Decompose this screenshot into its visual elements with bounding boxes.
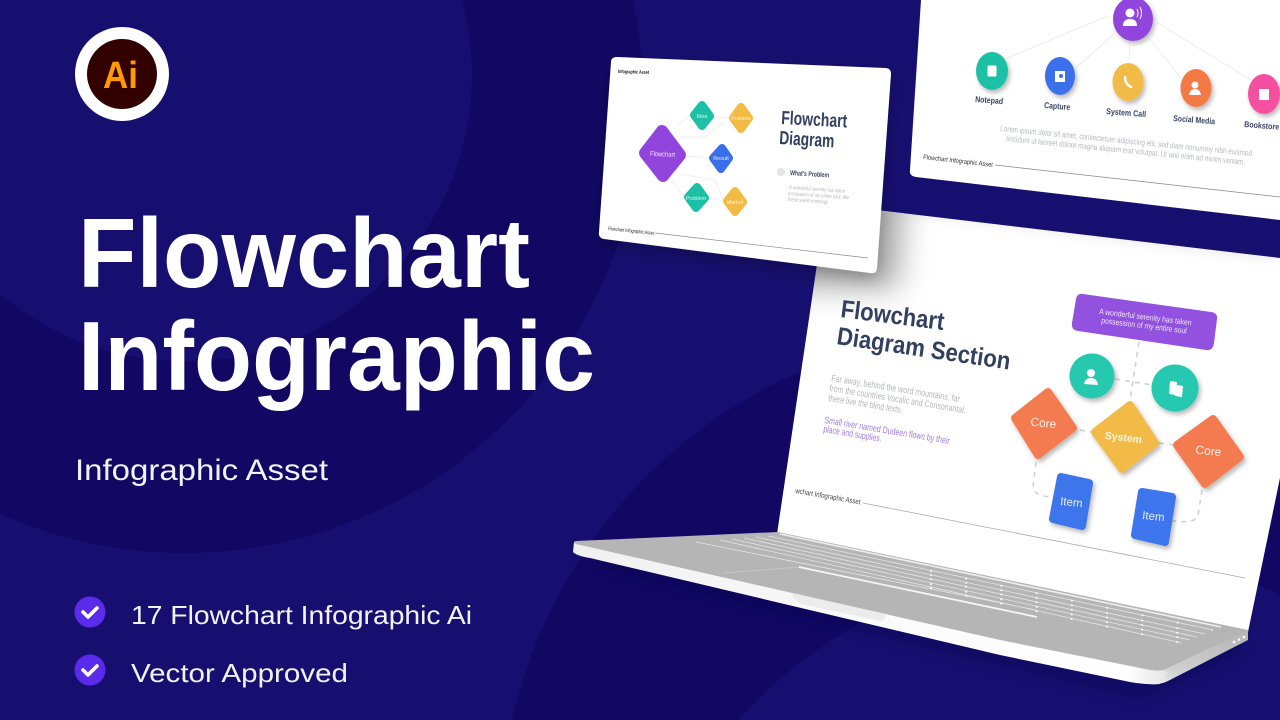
diamond: idea: Idea xyxy=(697,114,708,120)
title: Infographic xyxy=(78,301,595,411)
purple callout: possession of my entire soul xyxy=(1101,316,1187,335)
screen purple note xyxy=(823,415,951,447)
screen purple note: Small river named Dudeen flows by their xyxy=(824,415,951,447)
card: item right xyxy=(1135,492,1172,542)
diamond: result: Result xyxy=(713,156,729,162)
laptop screen xyxy=(777,210,1280,632)
teal circle: pages xyxy=(1152,364,1198,412)
screen title: Diagram Section xyxy=(835,322,1012,376)
diamond: system: System xyxy=(1104,430,1143,446)
laptop shadow xyxy=(600,562,1240,692)
node: capture: Capture xyxy=(1044,100,1071,112)
diamond: market xyxy=(727,191,744,212)
dashed connectors xyxy=(1033,342,1202,522)
laptop front lip xyxy=(573,542,1168,684)
footer: Flowchart Infographic Asset xyxy=(923,154,993,169)
node: hub xyxy=(1113,0,1153,41)
slide paragraph xyxy=(788,185,849,206)
diamond: core left xyxy=(1015,392,1073,455)
screen footer xyxy=(794,486,1245,578)
screen paragraph: there live the blind texts. xyxy=(828,393,903,416)
logo: Adobe Illustrator xyxy=(75,27,169,121)
title: Flowchart xyxy=(78,198,530,308)
laptop side xyxy=(1150,630,1248,684)
title xyxy=(78,198,595,411)
footer xyxy=(923,154,1280,197)
node: notepad: Notepad xyxy=(975,94,1004,106)
diamond: problem: Problem xyxy=(686,196,707,202)
diamond: flowchart: Flowchart xyxy=(650,151,675,159)
what's problem xyxy=(777,168,829,179)
laptop deck xyxy=(574,532,1248,671)
teal circle: people xyxy=(1070,354,1114,398)
diamond: core right: Core xyxy=(1195,443,1222,459)
slide paragraph: these sweet mornings xyxy=(788,197,828,206)
diamond: result xyxy=(713,148,729,169)
diamond: process xyxy=(731,107,751,129)
node: capture xyxy=(1044,57,1075,112)
laptop xyxy=(573,210,1280,684)
diamond: problem xyxy=(686,187,707,208)
screen purple note: place and supplies. xyxy=(823,424,883,445)
what's problem: What's Problem xyxy=(790,170,829,179)
diamond: core right xyxy=(1177,419,1240,484)
node: notepad xyxy=(975,52,1008,106)
logo: Adobe Illustrator: Ai xyxy=(103,55,138,97)
slide footer xyxy=(608,226,868,258)
slide footer: Flowchart Infographic Asset xyxy=(608,226,655,237)
panel: top right slide xyxy=(910,0,1280,220)
diamond: idea xyxy=(694,105,710,126)
keyboard xyxy=(696,534,1221,643)
diamond: market: Market xyxy=(727,200,744,206)
screen footer: wchart Infographic Asset xyxy=(794,486,862,507)
trackpad notch xyxy=(792,593,886,621)
slide paragraph: possession of my entire soul, like xyxy=(788,191,849,201)
node: system call xyxy=(1106,63,1147,119)
feature: 17 flowchart infographic: 17 Flowchart Infographic Ai xyxy=(131,600,472,630)
screen paragraph: Far away, behind the word mountains, far xyxy=(831,373,961,405)
card: item right: Item xyxy=(1142,510,1165,524)
purple callout xyxy=(1072,294,1217,350)
slide header: Infographic Asset xyxy=(618,69,649,76)
screen title: Flowchart xyxy=(839,295,947,336)
card: item left xyxy=(1053,477,1089,526)
subtitle: Infographic Asset xyxy=(75,454,329,487)
diamond: flowchart xyxy=(645,131,680,176)
diamond: process: Process xyxy=(731,116,751,122)
node: bookstore xyxy=(1244,74,1280,132)
connector lines xyxy=(1007,16,1251,80)
connector lines xyxy=(672,115,729,201)
feature: vector approved: Vector Approved xyxy=(131,658,348,688)
purple callout: A wonderful serenity has taken xyxy=(1099,307,1192,327)
slide title: Diagram xyxy=(779,128,835,152)
diamond: core left: Core xyxy=(1030,415,1057,431)
diamond: system xyxy=(1095,405,1155,469)
panel: flowchart diagram slide xyxy=(599,57,891,273)
node: social media: Social Media xyxy=(1173,113,1216,126)
slide paragraph: A wonderful serenity has taken xyxy=(789,185,845,195)
feature: vector approved xyxy=(74,654,348,688)
node: system call: System Call xyxy=(1106,106,1147,119)
card: item left: Item xyxy=(1060,496,1083,510)
screen paragraph: from the countries Vocalic and Consonantal. xyxy=(829,383,966,416)
node: social media xyxy=(1173,69,1216,126)
slide title: Flowchart xyxy=(781,108,848,132)
ports xyxy=(1233,636,1245,643)
screen title xyxy=(835,295,1012,376)
slide title xyxy=(779,108,848,152)
